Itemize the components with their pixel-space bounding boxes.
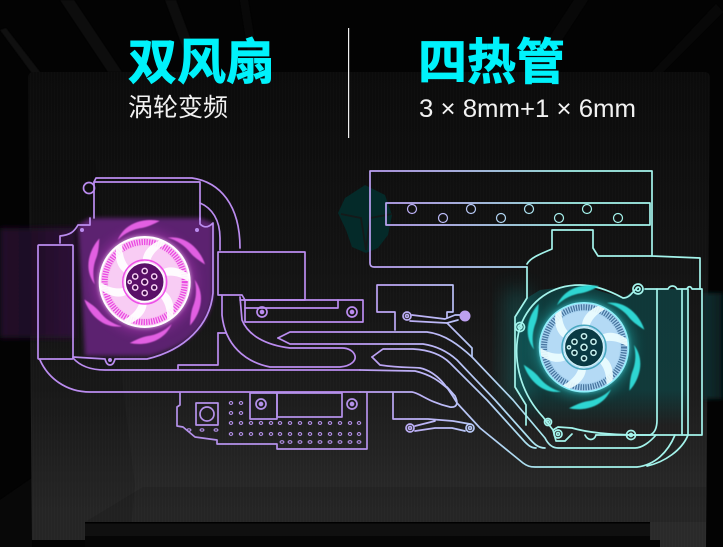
subheading: turbo frequency: 涡轮变频 <box>128 94 228 122</box>
outline: top right chassis block <box>370 171 700 289</box>
heat pipe and component outline diagram <box>38 171 702 467</box>
housing fill: left fan <box>78 218 213 356</box>
icon: left purple fan <box>78 220 212 344</box>
outline: lower link screws <box>406 424 474 432</box>
outline: circuit board <box>177 393 367 449</box>
ambient glow: left purple <box>0 228 75 338</box>
outline: screw bracket <box>245 300 363 322</box>
divider <box>348 28 349 138</box>
outline: lower link bar <box>393 393 470 431</box>
heading: four heat pipes: 四热管 <box>418 36 565 90</box>
bottom hinge recess <box>85 522 650 547</box>
outline: lower tubes from left fan <box>40 333 360 392</box>
outline: upper link bar <box>403 310 470 323</box>
outline: right fan housing <box>515 230 702 441</box>
icon: right teal fan <box>517 285 651 409</box>
heading: dual fans: 双风扇 <box>128 36 275 90</box>
outline: main heat pipes <box>278 323 688 467</box>
outline: central rectangle block <box>218 252 355 367</box>
right fan housing screws <box>516 284 643 440</box>
subheading: heat pipe specification: 3 × 8mm+1 × 6mm <box>419 95 636 123</box>
vent holes row <box>408 204 622 222</box>
ambient glow: right teal <box>703 293 723 399</box>
left housing screw dots <box>80 228 199 362</box>
circuit board pin dots <box>187 402 361 443</box>
outline: upper middle component <box>377 285 453 330</box>
outline: left fan housing <box>38 218 213 365</box>
outline: left top block and outer pipe <box>84 178 240 250</box>
housing fill: right fan <box>505 285 688 425</box>
icon: teal helmet logo <box>338 185 392 253</box>
